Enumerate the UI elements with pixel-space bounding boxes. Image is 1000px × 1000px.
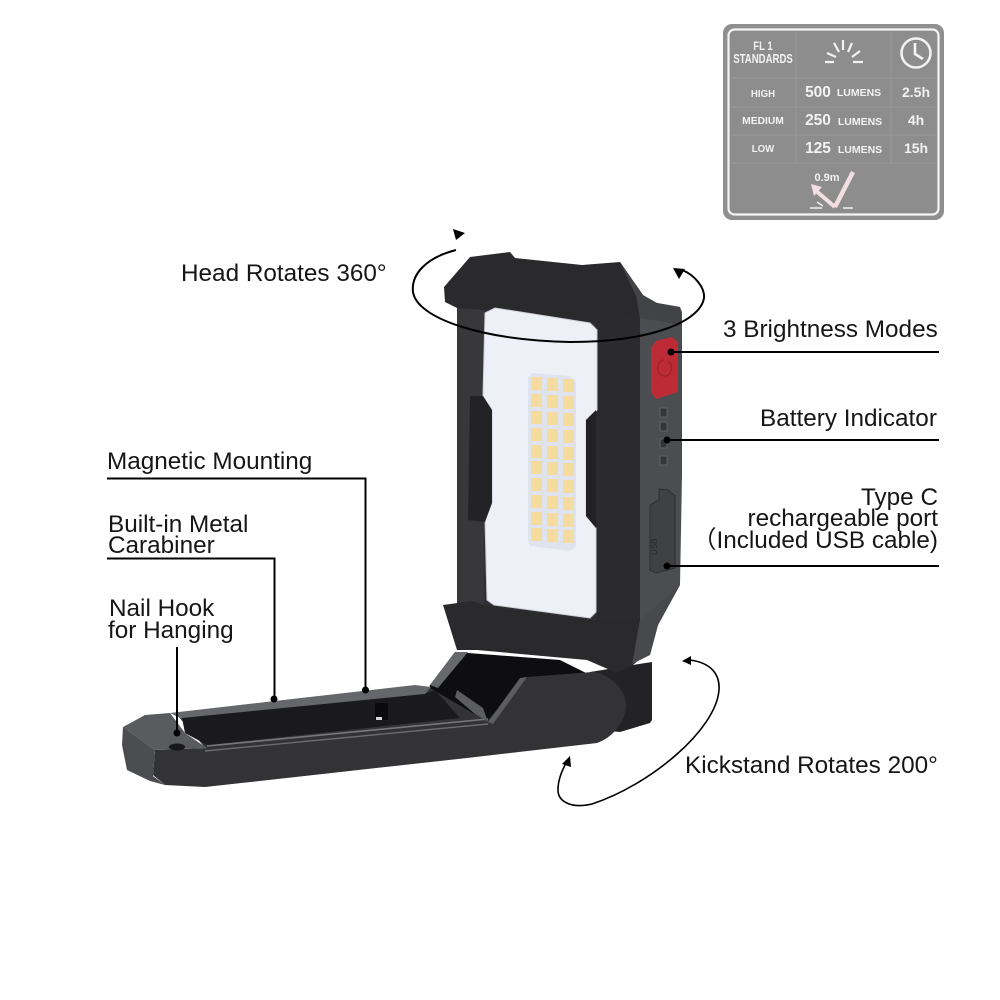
kickstand arm (122, 652, 626, 787)
callout: built-in metal carabiner (107, 511, 278, 702)
arrow: kickstand rotation (558, 656, 719, 806)
callout: Type C port: Type C (861, 484, 938, 511)
panel: brightness and runtime table (723, 24, 944, 220)
table rows: modes, lumens, runtimes: LUMENS (838, 144, 882, 156)
callout: built-in metal carabiner: Carabiner (108, 532, 215, 559)
bottom bumper (443, 601, 658, 673)
icon: clock (902, 38, 930, 68)
table rows: modes, lumens, runtimes (742, 84, 930, 157)
white light panel (483, 308, 597, 618)
red power button (651, 337, 678, 399)
table rows: modes, lumens, runtimes: 2.5h (902, 84, 930, 100)
callout: 3 brightness modes (668, 316, 939, 356)
LED plate (528, 373, 576, 551)
arm base fill (178, 688, 488, 750)
top lip (170, 685, 431, 719)
panel: brightness and runtime table: STANDARDS (733, 53, 793, 66)
table rows: modes, lumens, runtimes: 4h (908, 112, 924, 128)
table header: FL1 standards: FL 1 (753, 40, 773, 53)
USB port cover (650, 489, 675, 573)
callout: built-in metal carabiner: Built-in Metal (108, 511, 248, 538)
label: kickstand rotates: Kickstand Rotates 200° (685, 752, 938, 779)
light body side (630, 296, 682, 655)
label: head rotates: Head Rotates 360° (181, 260, 387, 287)
top bumper (444, 252, 643, 323)
product: folding work light (122, 252, 682, 787)
icon: 0.9m drop test: 0.9m (814, 172, 840, 184)
table rows: modes, lumens, runtimes: MEDIUM (742, 116, 784, 127)
front wing and struts (430, 652, 468, 688)
callout: magnetic mounting: Magnetic Mounting (107, 448, 312, 475)
callout: battery indicator: Battery Indicator (760, 405, 937, 432)
foot left face (122, 727, 165, 785)
callout: magnetic mounting (107, 448, 369, 694)
foot top face (123, 713, 207, 750)
battery indicator lights (660, 408, 667, 465)
table rows: modes, lumens, runtimes: LOW (752, 144, 775, 155)
USB port cover: USB (650, 539, 659, 555)
table rows: modes, lumens, runtimes: LUMENS (838, 116, 882, 128)
callout: battery indicator (664, 405, 939, 444)
storage slot (182, 690, 460, 745)
arrow: head rotation (413, 229, 704, 342)
callout: nail hook: for Hanging (108, 617, 234, 644)
callout: Type C port: （Included USB cable) (692, 527, 938, 554)
table rows: modes, lumens, runtimes: 125 (805, 140, 831, 157)
dark interior behind arm (420, 652, 590, 722)
table rows: modes, lumens, runtimes: 500 (805, 84, 831, 101)
icon: 0.9m drop test (810, 172, 853, 208)
table rows: modes, lumens, runtimes: HIGH (751, 89, 775, 100)
table rows: modes, lumens, runtimes: 250 (805, 112, 831, 129)
callout: nail hook: Nail Hook (109, 595, 215, 622)
table rows: modes, lumens, runtimes: LUMENS (837, 87, 881, 99)
callout: Type C port: rechargeable port (748, 505, 938, 532)
table rows: modes, lumens, runtimes: 15h (904, 140, 928, 156)
hook hole (169, 744, 185, 750)
callout: 3 brightness modes: 3 Brightness Modes (723, 316, 938, 343)
callout: nail hook (108, 595, 234, 736)
rails (207, 719, 488, 746)
callout: Type C port (664, 484, 939, 570)
arm front face (153, 672, 626, 787)
icon: brightness rays (825, 40, 863, 62)
light body front (457, 300, 640, 650)
kickstand hinge (590, 662, 652, 732)
side grips (468, 396, 492, 522)
